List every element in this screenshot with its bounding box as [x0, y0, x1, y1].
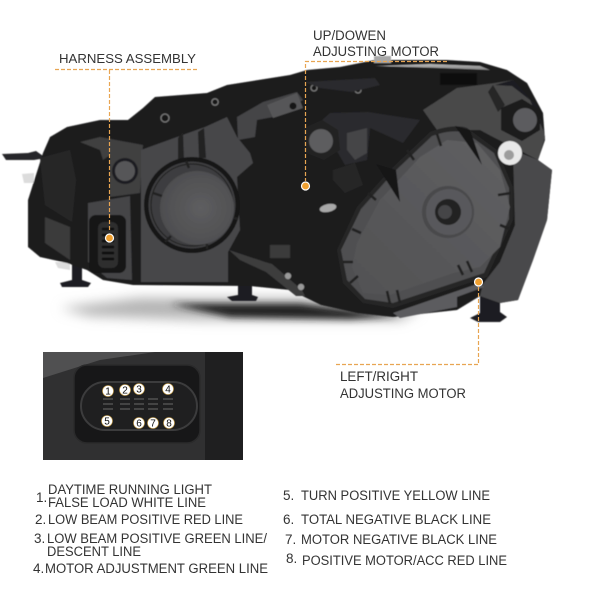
gray surround of bulb	[141, 117, 253, 282]
wire legend left column	[33, 482, 268, 576]
item 2: 2.	[35, 512, 46, 527]
centre blocks	[320, 112, 420, 165]
white screw	[498, 141, 522, 165]
item 1	[36, 482, 212, 510]
photo background	[43, 352, 243, 460]
item 1: 1.	[36, 490, 47, 505]
leader line	[306, 62, 447, 181]
hex adjuster right	[501, 99, 540, 141]
item 6: TOTAL NEGATIVE BLACK LINE	[301, 512, 491, 527]
upper left gray block	[80, 137, 143, 197]
motor fins and ribs	[376, 126, 482, 202]
leader line	[336, 287, 478, 364]
item 5: 5.	[283, 488, 294, 503]
hex adjuster left	[304, 120, 340, 160]
top ridge and slot	[375, 64, 505, 76]
item 8: 8.	[286, 551, 297, 566]
label text: LEFT/RIGHT	[340, 369, 418, 384]
connector inner oval	[81, 382, 197, 430]
item 1: DAYTIME RUNNING LIGHT	[48, 482, 212, 497]
label text: HARNESS ASSEMBLY	[59, 51, 196, 66]
headlight assembly	[2, 56, 552, 322]
item 5: TURN POSITIVE YELLOW LINE	[301, 488, 490, 503]
label text: ADJUSTING MOTOR	[340, 386, 466, 401]
callout: harness assembly	[55, 51, 197, 242]
mounting feet	[60, 262, 507, 322]
mounting bracket	[2, 151, 46, 160]
item 3: 3.	[34, 531, 45, 546]
lower tray	[393, 283, 484, 318]
item 8: POSITIVE MOTOR/ACC RED LINE	[302, 553, 507, 568]
item 7: MOTOR NEGATIVE BLACK LINE	[301, 532, 497, 547]
item 6: 6.	[283, 512, 294, 527]
pin 8: 8	[166, 418, 172, 430]
pin 7: 7	[150, 418, 156, 430]
item 4: 4.	[33, 561, 44, 576]
connector pins	[103, 399, 173, 409]
item 3: LOW BEAM POSITIVE GREEN LINE/	[47, 531, 267, 546]
bulb access cap	[144, 157, 240, 253]
connector block	[88, 196, 132, 280]
item 1: FALSE LOAD WHITE LINE	[48, 495, 206, 510]
clear lens edge	[22, 173, 70, 270]
item 7: 7.	[285, 532, 296, 547]
pin 4: 4	[165, 384, 171, 396]
connector outer shell	[74, 365, 200, 443]
small round cap	[112, 158, 138, 184]
linkage bracket	[229, 250, 305, 296]
marker dot	[302, 182, 310, 190]
headlight shadow	[60, 298, 420, 320]
left panel shading	[45, 217, 70, 260]
pin numbers	[102, 384, 174, 430]
connector close-up photo	[43, 352, 243, 460]
motor hub	[422, 186, 474, 238]
right side housing	[480, 150, 552, 303]
label text: UP/DOWEN	[313, 28, 386, 43]
callout: left/right adjusting motor	[336, 278, 482, 401]
pin 6: 6	[136, 418, 142, 430]
callout: up/down adjusting motor	[302, 28, 447, 190]
upper right housing	[423, 80, 545, 160]
item 4: MOTOR ADJUSTMENT GREEN LINE	[45, 561, 268, 576]
main housing body	[28, 60, 552, 317]
leader line	[55, 70, 197, 232]
wiring connector	[89, 215, 126, 273]
pin 2: 2	[122, 386, 128, 396]
marker dot	[474, 278, 482, 286]
pin 5: 5	[104, 416, 110, 428]
marker dot	[106, 234, 114, 242]
motor ring	[337, 126, 513, 308]
ridge mounting holes	[161, 85, 361, 122]
wire legend right column	[283, 488, 507, 568]
item 3	[34, 531, 267, 559]
small glint	[319, 202, 337, 214]
pin 1: 1	[105, 386, 111, 398]
item 2: LOW BEAM POSITIVE RED LINE	[48, 512, 243, 527]
item 3: DESCENT LINE	[47, 544, 141, 559]
pin 3: 3	[136, 384, 142, 396]
motor cover	[352, 140, 510, 295]
label text: ADJUSTING MOTOR	[313, 44, 439, 59]
upper gray panel	[237, 92, 303, 140]
